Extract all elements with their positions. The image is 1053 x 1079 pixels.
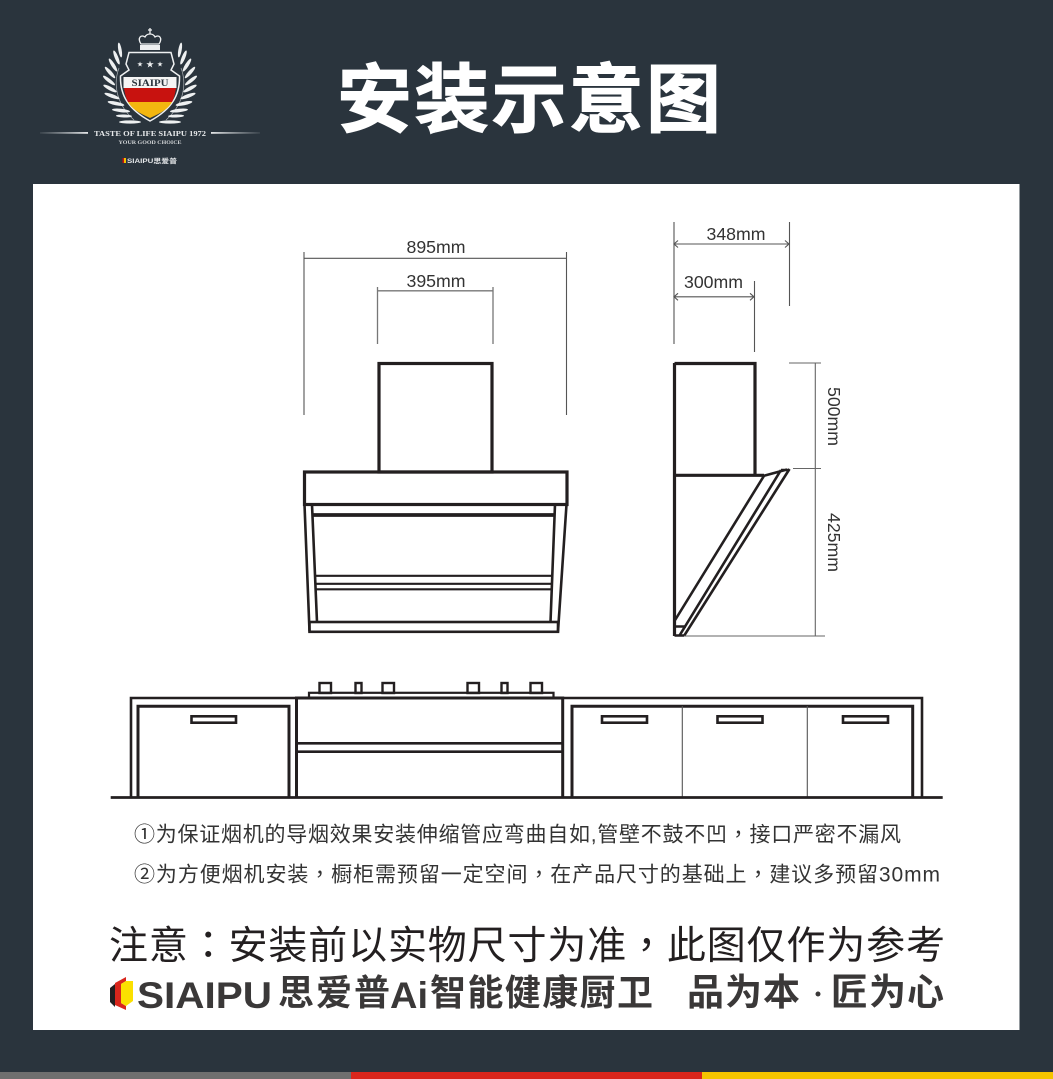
side view width dimensions xyxy=(674,222,790,352)
icon: shield: SIAIPU xyxy=(132,78,169,88)
icon: shield xyxy=(120,52,180,121)
brand name xyxy=(137,972,653,1016)
range hood side view xyxy=(674,363,790,636)
label: 895mm: 895mm xyxy=(407,237,465,257)
kitchen cabinet elevation xyxy=(111,683,943,798)
logo sub tagline: YOUR GOOD CHOICE xyxy=(118,140,182,146)
right cabinet xyxy=(563,698,922,797)
icon: crown xyxy=(139,28,161,50)
panel: white drawing area xyxy=(33,184,1020,1030)
icon: shield: ★ xyxy=(146,60,154,70)
title: 安装示意图 xyxy=(337,58,721,142)
logo tagline: TASTE OF LIFE SIAIPU 1972 xyxy=(94,129,206,138)
label: 395mm: 395mm xyxy=(407,271,465,291)
note 1: ①为保证烟机的导烟效果安装伸缩管应弯曲自如,管壁不鼓不凹，接口严密不漏风 xyxy=(134,818,901,848)
tricolour bottom stripe xyxy=(0,1072,1053,1079)
icon: shield: ★ xyxy=(157,60,163,68)
note 2: ②为方便烟机安装，橱柜需预留一定空间，在产品尺寸的基础上，建议多预留30mm xyxy=(134,858,940,888)
slogan: 品为本 xyxy=(687,972,800,1013)
brand name: 思爱普 xyxy=(278,972,390,1013)
small brand mark: SIAIPU思爱普 xyxy=(127,156,178,165)
brand name: SIAIPU xyxy=(137,975,272,1016)
brand name: 智能健康厨卫 xyxy=(430,972,653,1013)
slogan: 匠为心 xyxy=(831,972,944,1013)
logo: SIAIPU crest xyxy=(40,28,260,165)
slogan xyxy=(687,972,944,1013)
brand name: Ai xyxy=(390,975,428,1016)
label: 300mm: 300mm xyxy=(684,272,743,292)
label: 348mm: 348mm xyxy=(707,224,765,244)
icon: shield: ★ xyxy=(137,60,143,68)
side view height dimensions xyxy=(684,363,844,636)
center cabinet xyxy=(296,698,563,797)
brand footer xyxy=(110,972,944,1016)
icon: brand mark xyxy=(110,977,133,1010)
label: 500mm: 500mm xyxy=(824,387,844,446)
left cabinet xyxy=(131,698,296,797)
icon: laurel wreath xyxy=(102,42,198,124)
range hood front view xyxy=(304,364,567,632)
notice text: 注意：安装前以实物尺寸为准，此图仅作为参考 xyxy=(109,915,945,971)
label: 425mm: 425mm xyxy=(824,513,844,572)
cooktop xyxy=(309,683,554,698)
front view dimensions xyxy=(304,237,566,415)
small brand mark xyxy=(122,156,178,165)
ground line xyxy=(111,796,943,799)
